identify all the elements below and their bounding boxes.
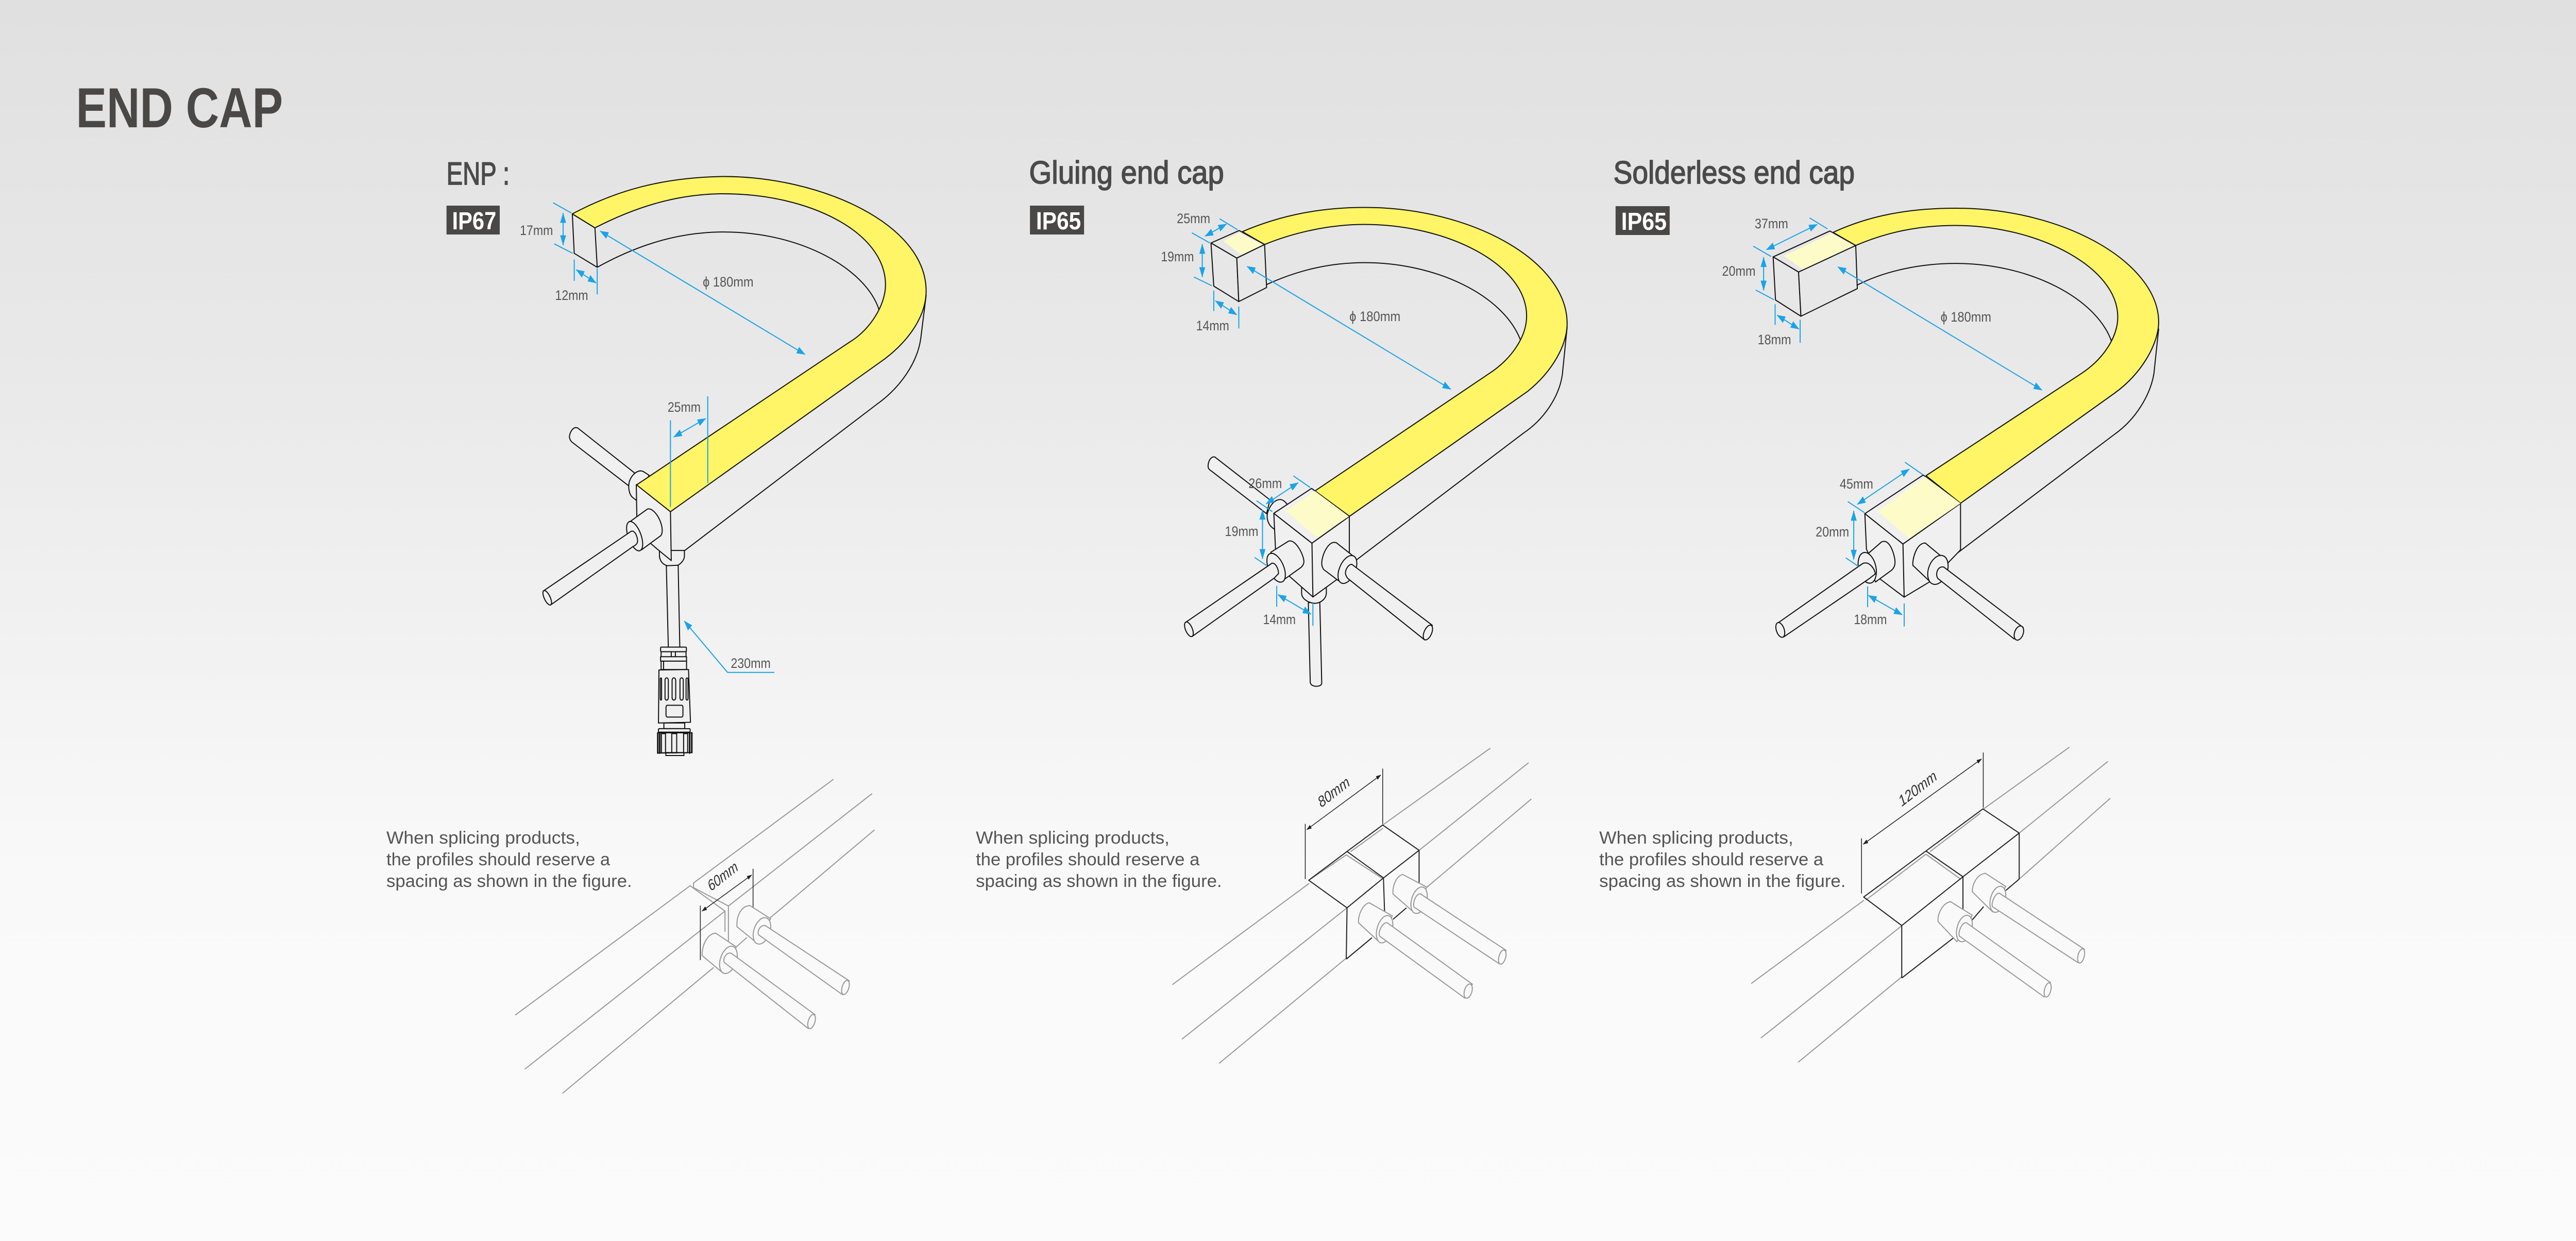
text: splice note 3: spacing as shown in the figure. bbox=[1599, 871, 1845, 891]
connector: ENP end with cables and plug bbox=[541, 484, 692, 756]
connector: gluing end cap with cables bbox=[1183, 457, 1434, 686]
dimension lines: gluing bbox=[1192, 219, 1451, 626]
diagram: neon strip ENP bbox=[572, 176, 926, 560]
text: splice note 1: spacing as shown in the figure. bbox=[386, 871, 632, 891]
heading: Solderless end cap: Solderless end cap bbox=[1614, 155, 1855, 191]
panel: Solderless end cap bbox=[1614, 155, 2159, 641]
dimension: 60mm bbox=[702, 858, 752, 911]
dimension labels: gluing: 25mm bbox=[1177, 211, 1210, 227]
text: splice note 3: When splicing products, bbox=[1599, 828, 1793, 848]
dimension labels: ENP: 12mm bbox=[555, 288, 588, 304]
panel: Gluing end cap bbox=[1029, 155, 1567, 686]
panel: splice ENP bbox=[386, 780, 874, 1093]
dimension labels: solderless: ϕ 180mm bbox=[1941, 310, 1991, 325]
dimension labels: solderless: 45mm bbox=[1840, 477, 1873, 492]
dimension labels: solderless: 37mm bbox=[1755, 216, 1788, 232]
dimension labels: gluing: ϕ 180mm bbox=[1349, 309, 1400, 325]
text: splice note 2: spacing as shown in the figure. bbox=[976, 871, 1222, 891]
dimension lines: ENP bbox=[553, 203, 805, 673]
heading: Gluing end cap: Gluing end cap bbox=[1029, 155, 1224, 191]
diagram: 120mm splice bbox=[1752, 747, 2110, 1062]
panel: splice solderless bbox=[1599, 747, 2110, 1062]
dimension labels: ENP: 25mm bbox=[668, 400, 701, 415]
dimension lines: solderless bbox=[1753, 218, 2042, 627]
dimension labels: gluing: 19mm bbox=[1225, 524, 1259, 540]
text: splice note 3: the profiles should reserve a bbox=[1599, 850, 1824, 869]
diagram: 60mm splice bbox=[516, 780, 874, 1093]
dimension labels: gluing: 26mm bbox=[1248, 476, 1282, 492]
text: splice note 2: When splicing products, bbox=[976, 828, 1170, 848]
diagram: neon strip solderless bbox=[1773, 208, 2159, 641]
dimension labels: solderless: 18mm bbox=[1854, 612, 1887, 628]
connector: ENP rear cable and collar bbox=[569, 428, 649, 500]
diagram: neon strip gluing bbox=[1211, 208, 1567, 560]
dimension labels: gluing: 19mm bbox=[1161, 249, 1194, 265]
dimension labels: ENP bbox=[520, 223, 771, 672]
dimension labels: solderless: 18mm bbox=[1758, 332, 1791, 348]
text: splice note 1: When splicing products, bbox=[386, 828, 580, 848]
badge: IP67: IP67 bbox=[452, 208, 496, 235]
dimension labels: solderless bbox=[1722, 216, 1991, 628]
text: splice note 2 bbox=[976, 828, 1222, 891]
text: splice note 1: the profiles should reserve a bbox=[386, 850, 611, 869]
dimension: 120mm bbox=[1863, 759, 1981, 844]
diagram: 80mm splice bbox=[1173, 748, 1531, 1063]
dimension: 80mm: 80mm bbox=[1315, 773, 1352, 811]
badge: IP65: IP65 bbox=[1036, 208, 1081, 235]
text: splice note 1 bbox=[386, 828, 632, 891]
dimension labels: solderless: 20mm bbox=[1722, 264, 1756, 279]
dimension labels: gluing: 14mm bbox=[1263, 612, 1296, 628]
title: END CAP bbox=[76, 76, 283, 140]
dimension: 80mm bbox=[1307, 773, 1381, 830]
badge: IP65: IP65 bbox=[1621, 208, 1667, 236]
dimension: 120mm: 120mm bbox=[1895, 767, 1939, 810]
dimension labels: gluing: 14mm bbox=[1196, 318, 1229, 334]
text: splice note 3 bbox=[1599, 828, 1845, 891]
text: splice note 2: the profiles should reserve a bbox=[976, 850, 1200, 869]
heading: ENP: ENP : bbox=[447, 156, 510, 192]
dimension labels: solderless: 20mm bbox=[1816, 525, 1849, 540]
dimension labels: gluing bbox=[1161, 211, 1400, 628]
dimension labels: ENP: 17mm bbox=[520, 223, 553, 239]
panel: ENP bbox=[447, 156, 926, 756]
dimension labels: ENP: ϕ 180mm bbox=[703, 275, 754, 290]
dimension labels: ENP: 230mm bbox=[731, 656, 771, 672]
panel: splice gluing bbox=[976, 748, 1531, 1063]
dimension: 60mm: 60mm bbox=[705, 858, 741, 894]
